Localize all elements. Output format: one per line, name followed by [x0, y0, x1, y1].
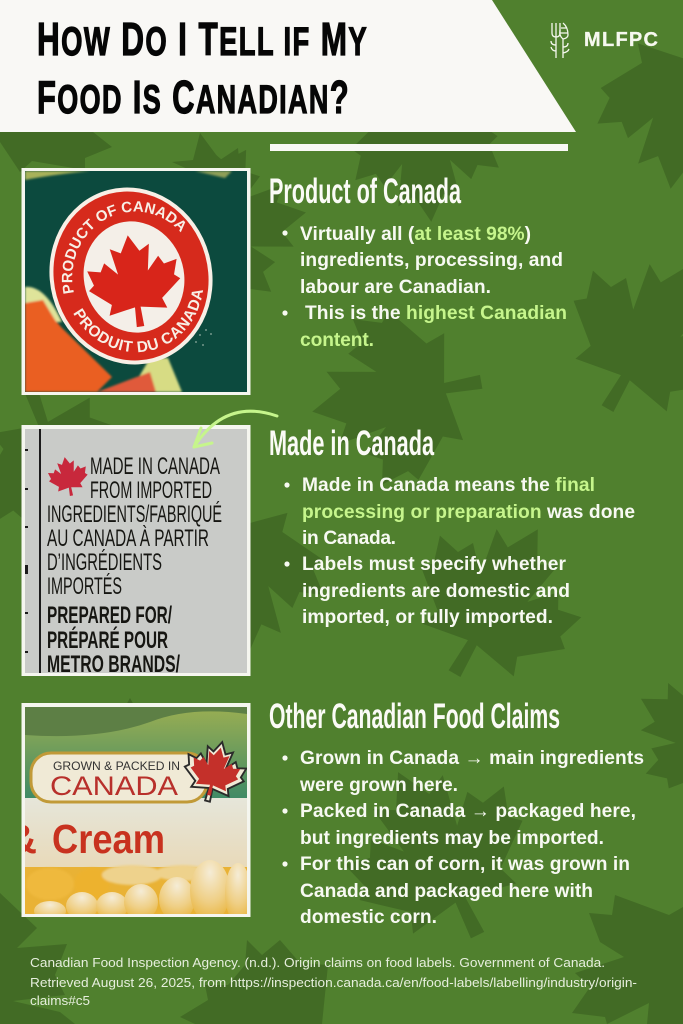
- citation: Retrieved August 26, 2025, from https://inspection.canada.ca/en/food-labels/labelling/industry/origin-: [30, 975, 637, 990]
- bullets: imported, or fully imported.: [302, 607, 553, 628]
- claim pill: [31, 753, 207, 802]
- bullets: For this can of corn, it was grown in: [300, 854, 630, 875]
- section: Made in Canada: [269, 424, 635, 628]
- banner shape: [0, 0, 576, 132]
- citation: Canadian Food Inspection Agency. (n.d.). Origin claims on food labels. Government of Canada.: [30, 955, 605, 970]
- bullets: Labels must specify whether: [302, 554, 567, 575]
- bullets: Grown in Canada → main ingredients: [300, 748, 644, 769]
- bullets: Virtually all (at least 98%): [300, 224, 531, 245]
- photo: can of corn label: CANADA: [50, 771, 178, 801]
- photo: made in Canada label: [22, 425, 250, 678]
- sticker: [49, 188, 213, 364]
- title: HOW DO I TELL IF MY: [37, 13, 368, 65]
- bullets: labour are Canadian.: [300, 277, 491, 298]
- red maple leaf: [183, 740, 247, 803]
- section: Product of Canada: [269, 172, 567, 351]
- bullets: domestic corn.: [300, 907, 437, 928]
- bullets: Canada and packaged here with: [300, 881, 593, 902]
- label text: PREPARED FOR/: [47, 602, 172, 629]
- label text: AU CANADA À PARTIR: [47, 525, 209, 552]
- header banner: [0, 0, 576, 132]
- bullets: were grown here.: [299, 775, 458, 796]
- bullets: in Canada.: [302, 528, 396, 549]
- sticker: PRODUCT OF CANADA: [62, 201, 186, 294]
- cream text: [25, 824, 163, 854]
- label text: FROM IMPORTED: [90, 477, 212, 504]
- photo: product of Canada sticker: [22, 168, 250, 395]
- citation: [30, 955, 637, 1008]
- logo: MLFPC: [551, 23, 658, 58]
- bullets: ingredients, processing, and: [300, 250, 563, 271]
- heading: Made in Canada: [269, 424, 434, 463]
- photo: can of corn label: GROWN & PACKED IN: [53, 759, 180, 773]
- label text: D’INGRÉDIENTS: [47, 549, 162, 576]
- label text: METRO BRANDS/: [47, 651, 180, 678]
- bullets: This is the highest Canadian: [305, 303, 567, 324]
- title: [37, 13, 368, 123]
- bullets: [282, 748, 644, 928]
- arrow: [194, 411, 277, 447]
- label maple leaf: [48, 457, 88, 496]
- heading: Product of Canada: [269, 172, 461, 211]
- wordmark: MLFPC: [584, 29, 658, 51]
- label text: [47, 453, 222, 678]
- label text: IMPORTÉS: [47, 573, 122, 600]
- bullets: [284, 475, 635, 628]
- label text: MADE IN CANADA: [90, 453, 220, 480]
- bullets: Made in Canada means the final: [302, 475, 595, 496]
- title: FOOD IS CANADIAN?: [37, 71, 350, 123]
- label text: PRÉPARÉ POUR: [47, 626, 168, 654]
- photo: can of corn label: [7, 703, 252, 923]
- citation: claims#c5: [30, 993, 90, 1008]
- bullets: [282, 224, 567, 351]
- cream text: &: [7, 816, 37, 862]
- divider bar: [270, 144, 568, 151]
- sticker: PRODUIT DU CANADA: [74, 290, 204, 352]
- bullets: content.: [300, 330, 374, 351]
- icon: fork and wheat: [551, 23, 569, 58]
- label text: INGREDIENTS/FABRIQUÉ: [47, 501, 222, 528]
- bullets: ingredients are domestic and: [302, 581, 570, 602]
- bullets: Packed in Canada → packaged here,: [300, 801, 636, 822]
- bullets: processing or preparation was done: [302, 502, 635, 523]
- section: Other Canadian Food Claims: [269, 697, 644, 928]
- cream text: Cream: [52, 816, 165, 862]
- bullets: but ingredients may be imported.: [300, 828, 604, 849]
